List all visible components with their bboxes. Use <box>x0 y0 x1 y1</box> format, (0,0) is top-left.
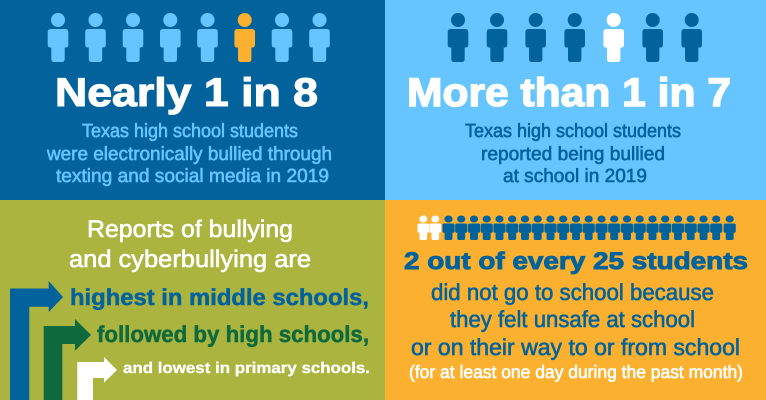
heading: more than 1 in 7: More than 1 in 7 <box>407 71 731 115</box>
panel: bullied at school <box>385 0 766 200</box>
text block: bullied at school description: Texas high school students <box>465 121 681 142</box>
text: highest in middle schools: highest in middle schools, <box>70 284 369 310</box>
icon row: 1 in 7 students <box>448 13 702 62</box>
heading: reports of bullying <box>69 216 311 273</box>
text block: did not go to school: or on their way to or from school <box>411 334 740 360</box>
text block: bullied at school description <box>465 121 681 187</box>
text block: did not go to school: did not go to school because <box>431 279 714 305</box>
text: followed by high schools: followed by high schools, <box>97 321 369 347</box>
text block: did not go to school: they felt unsafe at school <box>450 306 695 332</box>
arrow: middle schools <box>10 281 63 400</box>
heading: nearly 1 in 8: Nearly 1 in 8 <box>55 71 318 115</box>
text block: electronic bullying description: were electronically bullied through <box>46 144 332 165</box>
text block: electronic bullying description <box>46 121 332 187</box>
icon row: 2 out of 25 students <box>417 216 736 240</box>
panel: reports by school level <box>0 200 385 400</box>
arrow: high schools <box>44 319 91 400</box>
icon row: 1 in 8 students <box>48 13 330 62</box>
panel: missed school <box>385 200 766 400</box>
text block: electronic bullying description: texting and social media in 2019 <box>56 166 329 187</box>
heading: reports of bullying: Reports of bullying <box>87 216 293 243</box>
text block: bullied at school description: at school in 2019 <box>503 166 647 187</box>
arrow: primary schools <box>77 357 117 400</box>
panel: electronic bullying <box>0 0 385 200</box>
text: lowest in primary schools: and lowest in primary schools. <box>123 360 370 377</box>
text block: did not go to school <box>411 279 740 360</box>
heading: 2 out of every 25 students: 2 out of every 25 students <box>404 248 748 275</box>
text block: electronic bullying description: Texas high school students <box>82 121 298 142</box>
footnote: past month: (for at least one day during the past month) <box>409 362 743 382</box>
text block: bullied at school description: reported being bullied <box>481 144 665 165</box>
heading: reports of bullying: and cyberbullying are <box>69 246 311 273</box>
